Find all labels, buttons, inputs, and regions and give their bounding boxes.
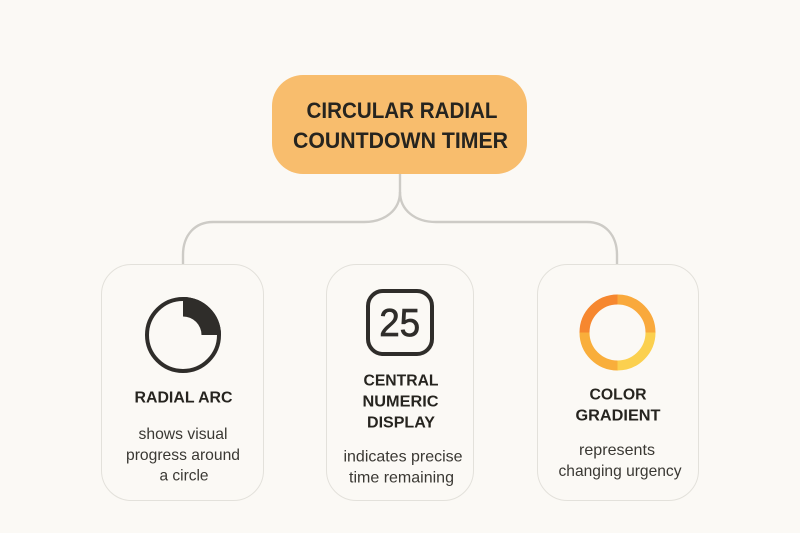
heading: central numeric display: DISPLAY	[367, 414, 435, 432]
icon: radial arc	[147, 297, 221, 371]
text: radial arc description	[126, 426, 240, 484]
title box: CIRCULAR RADIAL	[306, 98, 498, 123]
heading: central numeric display: CENTRAL	[364, 372, 439, 390]
icon: number 25	[368, 291, 432, 354]
title box: COUNTDOWN TIMER	[293, 128, 508, 153]
heading: radial arc: RADIAL ARC	[134, 390, 233, 406]
connector lines	[183, 174, 617, 264]
heading: color gradient	[576, 386, 661, 424]
panel: radial arc	[102, 264, 264, 500]
text: radial arc description: a circle	[160, 468, 209, 484]
text: radial arc description: shows visual	[138, 426, 228, 443]
icon: number 25: 25	[379, 302, 420, 345]
icon: segmented color ring	[584, 300, 650, 366]
text: numeric display description: time remaining	[349, 470, 454, 486]
text: color gradient description	[558, 442, 682, 480]
text: radial arc description: progress around	[126, 447, 240, 464]
text: color gradient description: changing urgency	[558, 463, 682, 480]
title box	[272, 75, 527, 174]
heading: central numeric display: NUMERIC	[362, 394, 439, 410]
heading: color gradient: GRADIENT	[576, 408, 661, 424]
text: color gradient description: represents	[579, 442, 655, 459]
panel: central numeric display	[326, 264, 474, 500]
text: numeric display description: indicates precise	[344, 448, 463, 466]
panel: color gradient	[538, 264, 698, 500]
heading: central numeric display	[362, 372, 439, 432]
text: numeric display description	[344, 448, 463, 486]
heading: color gradient: COLOR	[590, 386, 647, 404]
